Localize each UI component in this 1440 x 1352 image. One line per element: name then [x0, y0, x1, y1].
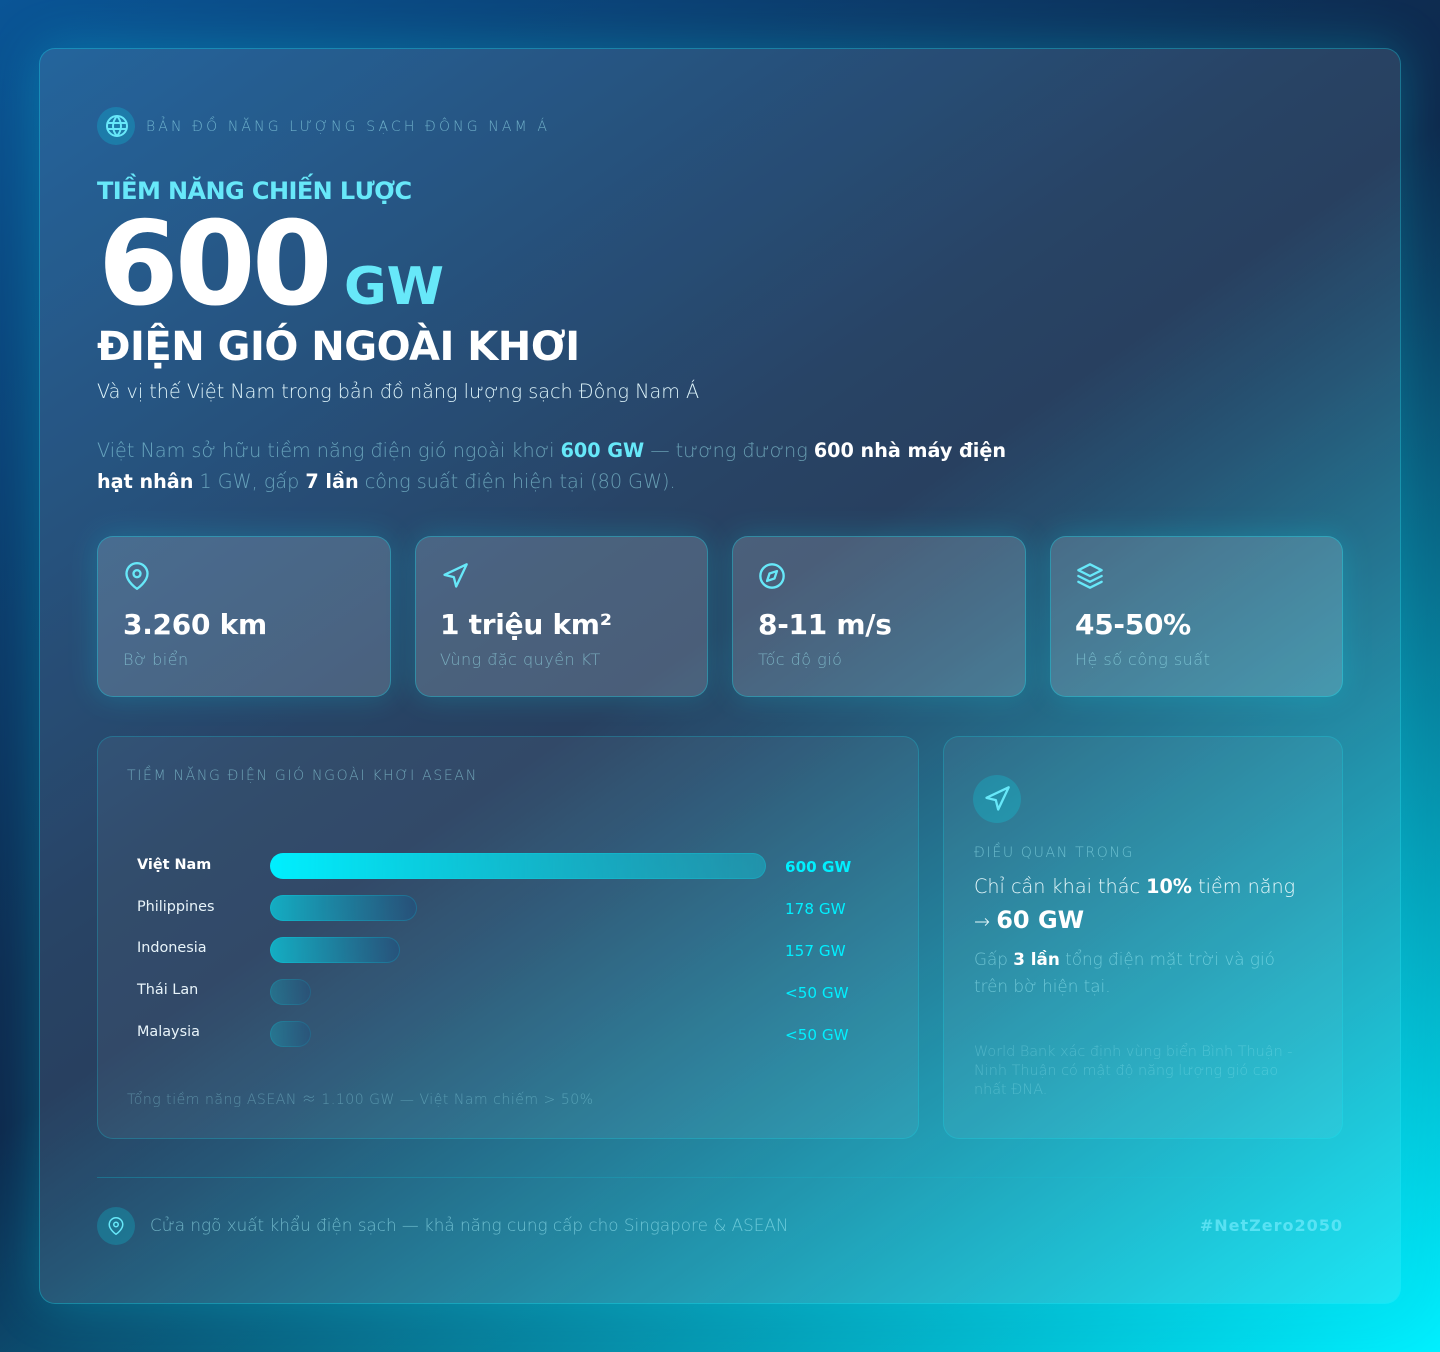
row: Philippines: Philippines [137, 899, 215, 915]
panel: ASEAN bar chart [97, 736, 919, 1139]
chart footnote: Tổng tiềm năng ASEAN ≈ 1.100 GW — Việt Nam chiếm > 50% [127, 1092, 594, 1108]
stat card: capacity factor [1050, 536, 1343, 697]
stat card: coastline: 3.260 km [123, 608, 267, 641]
intro paragraph: hạt nhân 1 GW, gấp 7 lần công suất điện hiện tại (80 GW). [97, 470, 676, 493]
insight detail: Gấp 3 lần tổng điện mặt trời và gió [974, 949, 1275, 969]
insight value: → 60 GW [974, 906, 1084, 934]
main title: ĐIỆN GIÓ NGOÀI KHƠI [97, 324, 580, 370]
insight label: ĐIỀU QUAN TRỌNG [974, 845, 1134, 861]
panel: key insight [943, 736, 1343, 1139]
stat card: capacity factor: Hệ số công suất [1075, 650, 1210, 669]
hashtag: #NetZero2050 [1200, 1216, 1343, 1234]
stat card: coastline [97, 536, 391, 697]
text: 157 GW [785, 942, 846, 960]
insight note: Ninh Thuận có mật độ năng lượng gió cao [974, 1063, 1278, 1079]
icon: layers [1077, 563, 1103, 589]
header label: BẢN ĐỒ NĂNG LƯỢNG SẠCH ĐÔNG NAM Á [146, 119, 550, 135]
stat card: capacity factor: 45-50% [1075, 608, 1191, 641]
icon: compass [759, 563, 785, 589]
insight note: nhất ĐNA. [974, 1082, 1047, 1098]
stat card: EEZ: Vùng đặc quyền KT [440, 650, 601, 669]
footer icon: map pin [97, 1207, 135, 1245]
stat card: EEZ [414, 536, 708, 697]
intro paragraph: Việt Nam sở hữu tiềm năng điện gió ngoài khơi 600 GW — tương đương 600 nhà máy điện [97, 439, 1006, 462]
insight note [974, 1043, 1292, 1098]
text: 600 GW [785, 858, 851, 876]
stat card: wind speed: 8-11 m/s [758, 608, 892, 641]
bar chart [136, 853, 851, 1047]
text: <50 GW [785, 984, 849, 1002]
row: Malaysia: Malaysia [137, 1024, 200, 1040]
stat card: EEZ: 1 triệu km² [440, 608, 612, 641]
subtitle: Và vị thế Việt Nam trong bản đồ năng lượng sạch Đông Nam Á [97, 380, 699, 403]
row: Thái Lan: Thái Lan [137, 982, 198, 998]
hero number: 600 [98, 197, 329, 332]
text: <50 GW [785, 1026, 849, 1044]
insight note: World Bank xác định vùng biển Bình Thuận - [974, 1044, 1292, 1060]
chart title: TIỀM NĂNG ĐIỆN GIÓ NGOÀI KHƠI ASEAN [127, 768, 478, 784]
stat card: coastline: Bờ biển [123, 650, 189, 669]
icon: navigation badge [973, 775, 1021, 823]
insight headline: Chỉ cần khai thác 10% tiềm năng [974, 875, 1295, 898]
footer text: Cửa ngõ xuất khẩu điện sạch — khả năng cung cấp cho Singapore & ASEAN [150, 1215, 788, 1235]
eyebrow heading: TIỀM NĂNG CHIẾN LƯỢC [97, 177, 412, 205]
insight detail [974, 949, 1275, 996]
text: 178 GW [785, 900, 846, 918]
hero unit: GW [344, 257, 444, 317]
row: Việt Nam: Việt Nam [137, 857, 211, 873]
icon: navigation [443, 563, 468, 588]
stat card: wind speed [732, 536, 1026, 697]
stat card: wind speed: Tốc độ gió [758, 650, 842, 669]
header badge icon: globe [97, 107, 135, 145]
intro paragraph [97, 439, 1006, 493]
insight detail: trên bờ hiện tại. [974, 976, 1111, 996]
row: Indonesia: Indonesia [137, 940, 207, 956]
icon: map pin [125, 562, 149, 590]
